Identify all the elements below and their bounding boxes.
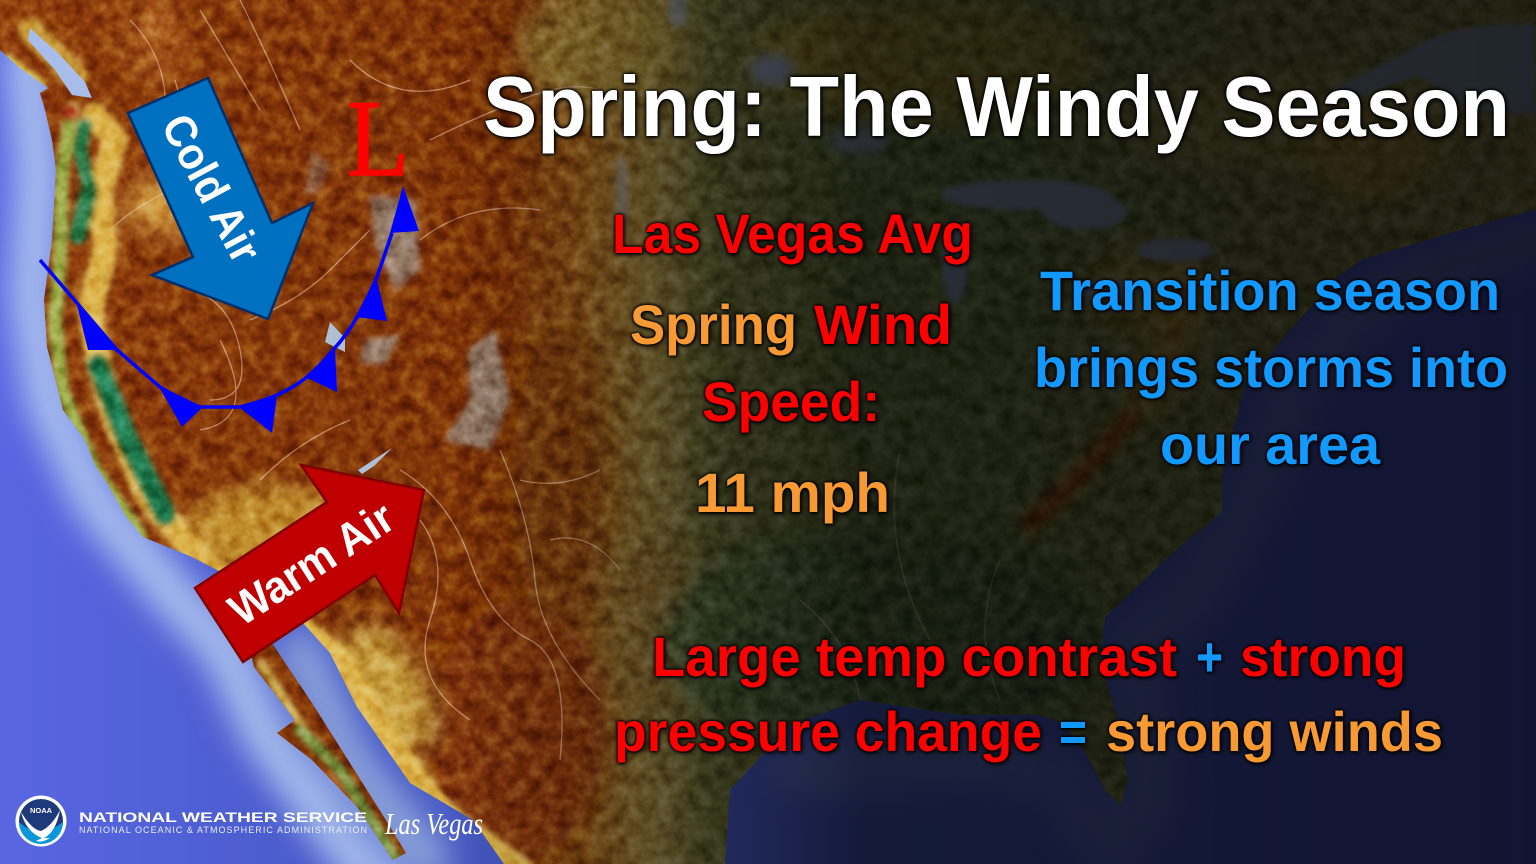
label: Spring Wind: Spring [630, 293, 797, 356]
panel: Las Vegas average wind speed [612, 202, 973, 524]
arrow: cold air [128, 78, 313, 319]
arrow: warm air [195, 465, 424, 662]
text block: wind equation: = [1059, 700, 1087, 763]
text block: transition season: our area [1160, 413, 1381, 476]
text block: transition season: Transition season [1040, 259, 1500, 322]
text block: wind equation: pressure change [614, 700, 1042, 763]
text block: transition season: brings storms into [1034, 336, 1508, 399]
coastal ranges [8, 30, 520, 864]
arrow: warm air: Warm Air [219, 491, 403, 635]
office name: Las Vegas [384, 806, 483, 841]
text block: wind equation: Large temp contrast [652, 625, 1177, 688]
arrow: cold air: Cold Air [151, 106, 272, 271]
rocky peaks [305, 150, 510, 450]
logo: National Weather Service Las Vegas [16, 796, 483, 846]
value: 11 mph: 11 mph [695, 461, 890, 524]
icon: NOAA seal: NOAA [30, 806, 53, 815]
low pressure symbol: L [347, 78, 409, 199]
rivers [110, 0, 1000, 760]
title: Spring: The Windy Season [483, 60, 1510, 155]
organisation subtitle: NATIONAL OCEANIC & ATMOSPHERIC ADMINISTRATION [79, 825, 367, 835]
icon: NOAA seal [16, 796, 66, 846]
label: Speed: Speed: [702, 370, 880, 433]
text block: wind equation [614, 625, 1443, 763]
label: Las Vegas Avg: Las Vegas Avg [612, 202, 973, 265]
cold front [40, 186, 419, 433]
label: Spring Wind: Wind [814, 293, 952, 356]
Appalachian ridge [1026, 416, 1134, 528]
text block: wind equation: + [1196, 625, 1223, 688]
coastal waters and lakes [28, 0, 1536, 474]
label: Spring Wind [630, 293, 952, 356]
text block: wind equation: strong winds [1106, 700, 1443, 763]
text block: wind equation: strong [1240, 625, 1406, 688]
text block: transition season [1034, 259, 1508, 476]
organisation name: NATIONAL WEATHER SERVICE [79, 809, 367, 825]
